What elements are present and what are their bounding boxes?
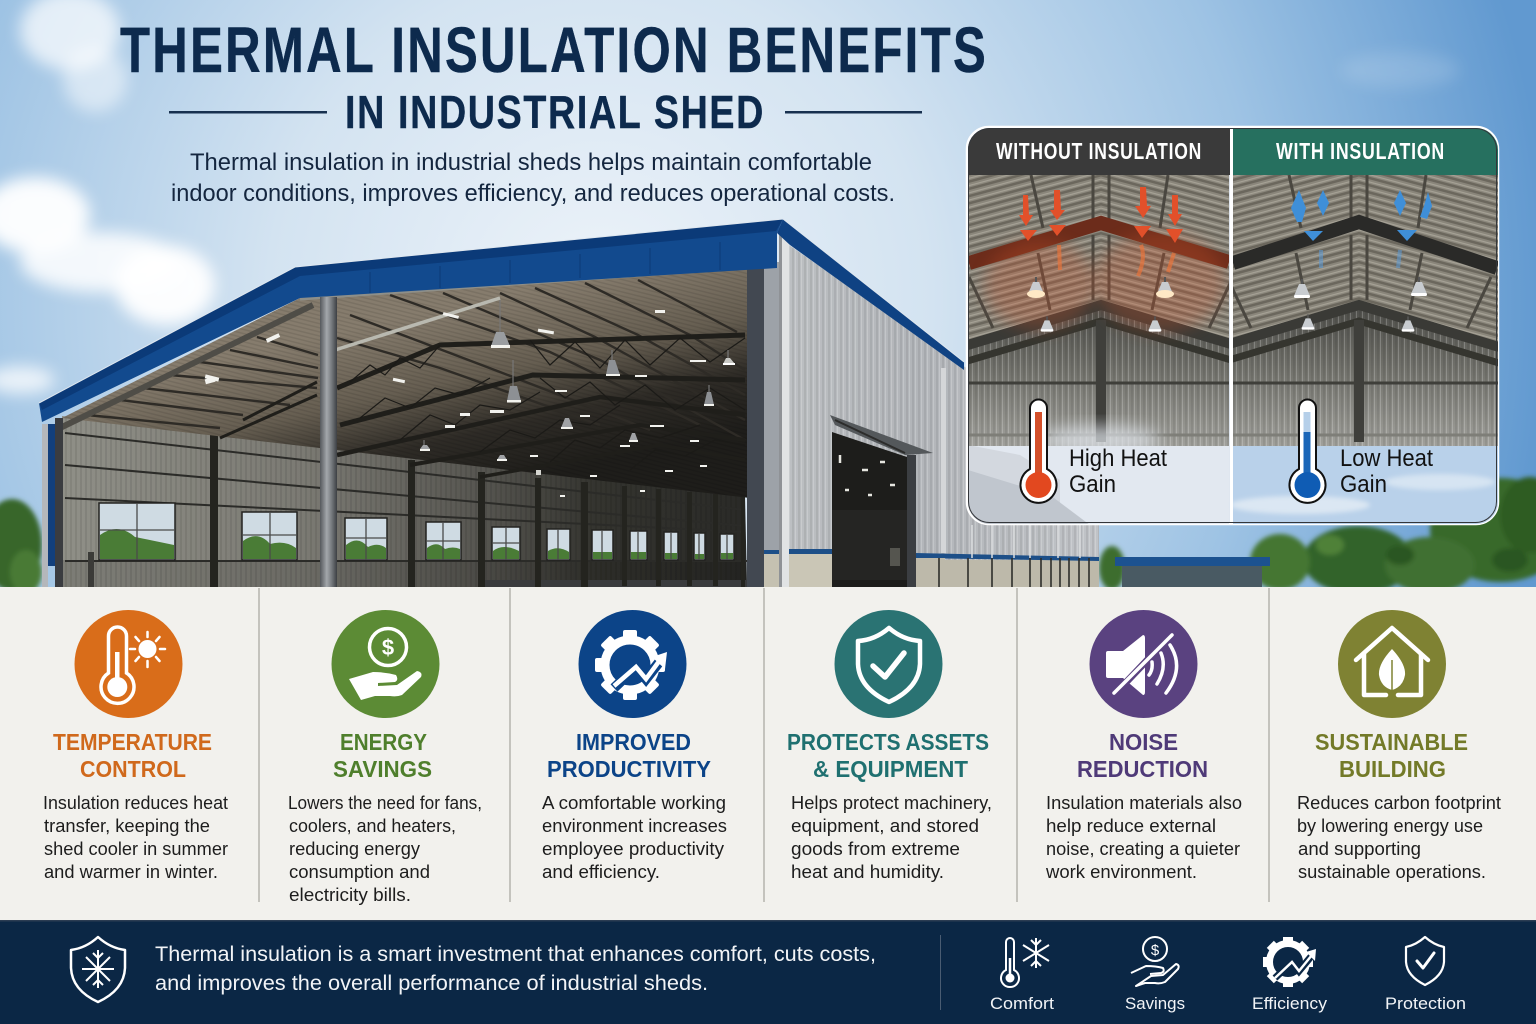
header: with insulation: WITH INSULATION — [1276, 138, 1445, 164]
body text: Helps protect machinery, — [791, 793, 992, 813]
body text — [791, 793, 992, 882]
footer band — [0, 920, 1536, 1024]
intro paragraph — [171, 149, 895, 207]
heading: SAVINGS — [333, 756, 432, 782]
body text: electricity bills. — [289, 885, 411, 905]
shed building — [39, 219, 1099, 587]
heading: CONTROL — [80, 756, 186, 782]
heading: REDUCTION — [1077, 756, 1208, 782]
body text: reducing energy — [289, 839, 420, 859]
back wall with windows — [62, 416, 747, 587]
body text: noise, creating a quieter — [1046, 839, 1240, 859]
header: without insulation: WITHOUT INSULATION — [996, 138, 1202, 164]
body text: transfer, keeping the — [44, 816, 210, 836]
blue roof fascia — [39, 219, 964, 422]
label: low heat gain: Gain — [1340, 471, 1387, 498]
label: high heat gain — [1069, 445, 1167, 498]
heading: PRODUCTIVITY — [547, 756, 711, 782]
panel: sustainable building — [1297, 610, 1501, 882]
body text: consumption and — [289, 862, 430, 882]
label: high heat gain: Gain — [1069, 471, 1116, 498]
header: with insulation — [1233, 128, 1499, 175]
panel: noise reduction — [1045, 610, 1242, 882]
icon: savings: $ — [1151, 942, 1160, 959]
ceiling trusses and purlins — [60, 266, 750, 498]
trees and distant building — [0, 477, 1536, 594]
subtitle with rules: IN INDUSTRIAL SHED — [345, 86, 765, 138]
label: low heat gain: Low Heat — [1340, 445, 1433, 472]
body text — [1045, 793, 1242, 882]
heading: BUILDING — [1339, 756, 1446, 782]
body text: Reduces carbon footprint — [1297, 793, 1501, 813]
body text: help reduce external — [1046, 816, 1216, 836]
side door opening — [830, 415, 933, 587]
icon: coin and hand — [332, 610, 440, 718]
panel: protects assets and equipment — [787, 610, 992, 882]
intro paragraph: indoor conditions, improves efficiency, and reduces operational costs. — [171, 180, 895, 207]
label: low heat gain — [1340, 445, 1433, 498]
icon: savings — [1131, 937, 1179, 986]
body text: and warmer in winter. — [44, 862, 218, 882]
body text: Lowers the need for fans, — [288, 793, 482, 813]
body text: A comfortable working — [542, 793, 726, 813]
heading — [1315, 729, 1468, 782]
label: efficiency: Efficiency — [1252, 994, 1328, 1013]
heading — [1077, 729, 1208, 782]
body text: equipment, and stored — [791, 816, 979, 836]
heading: NOISE — [1109, 729, 1178, 755]
icon: house with leaf — [1338, 610, 1446, 718]
icon: efficiency — [1263, 937, 1316, 987]
icon: shield with check — [834, 610, 942, 718]
closing statement: and improves the overall performance of industrial sheds. — [155, 971, 708, 995]
closing statement — [155, 942, 876, 995]
icon: shield with snowflake — [71, 937, 125, 1002]
heading: ENERGY — [340, 729, 427, 755]
body text: goods from extreme — [791, 839, 960, 859]
lower strip backdrops — [968, 445, 1498, 525]
benefits band — [0, 587, 1536, 920]
label: savings: Savings — [1125, 994, 1185, 1013]
heading: & EQUIPMENT — [813, 756, 968, 782]
body text: Insulation reduces heat — [43, 793, 228, 813]
heading: PROTECTS ASSETS — [787, 729, 989, 755]
side wall — [764, 245, 1099, 587]
closing statement: Thermal insulation is a smart investment that enhances comfort, cuts costs, — [155, 942, 876, 966]
icon: thermometer and sun — [74, 610, 182, 718]
body text: and supporting — [1298, 839, 1421, 859]
label: comfort: Comfort — [990, 994, 1054, 1013]
icon: muted speaker — [1090, 610, 1198, 718]
header: without insulation — [968, 128, 1230, 175]
body text: employee productivity — [542, 839, 724, 859]
title: THERMAL INSULATION BENEFITS — [120, 14, 988, 86]
heading: IMPROVED — [576, 729, 691, 755]
icon: protection — [1406, 937, 1444, 985]
right ceiling scene with cool arrows — [1219, 175, 1499, 446]
intro paragraph: Thermal insulation in industrial sheds helps maintain comfortable — [190, 149, 872, 176]
label: high heat gain: High Heat — [1069, 445, 1167, 472]
heading — [547, 729, 711, 782]
icon: gear with rising arrow — [578, 610, 686, 718]
heading — [787, 729, 989, 782]
heading: TEMPERATURE — [53, 729, 212, 755]
thermometer: high heat — [1020, 400, 1056, 503]
background: sky with clouds — [0, 0, 1536, 590]
panel: improved productivity — [542, 610, 727, 882]
body text — [1297, 793, 1501, 882]
body text — [288, 793, 482, 905]
icon: coin and hand: $ — [382, 635, 394, 660]
icon: comfort — [1001, 938, 1049, 987]
body text: Insulation materials also — [1046, 793, 1242, 813]
panel: energy savings — [288, 610, 482, 905]
body text — [43, 793, 228, 882]
front columns — [42, 233, 789, 587]
body text: coolers, and heaters, — [289, 816, 456, 836]
body text: by lowering energy use — [1297, 816, 1483, 836]
body text: sustainable operations. — [1298, 862, 1486, 882]
body text: work environment. — [1045, 862, 1197, 882]
heading — [53, 729, 212, 782]
body text: shed cooler in summer — [44, 839, 228, 859]
heading: SUSTAINABLE — [1315, 729, 1468, 755]
body text: environment increases — [542, 816, 727, 836]
thermometer: low heat — [1290, 400, 1325, 503]
panel: without vs with insulation comparison — [961, 127, 1499, 525]
body text: and efficiency. — [542, 862, 660, 882]
heading — [333, 729, 432, 782]
body text: heat and humidity. — [791, 862, 944, 882]
body text — [542, 793, 727, 882]
panel: temperature control — [43, 610, 228, 882]
label: protection: Protection — [1385, 994, 1466, 1013]
left ceiling scene with heat arrows — [961, 175, 1241, 454]
